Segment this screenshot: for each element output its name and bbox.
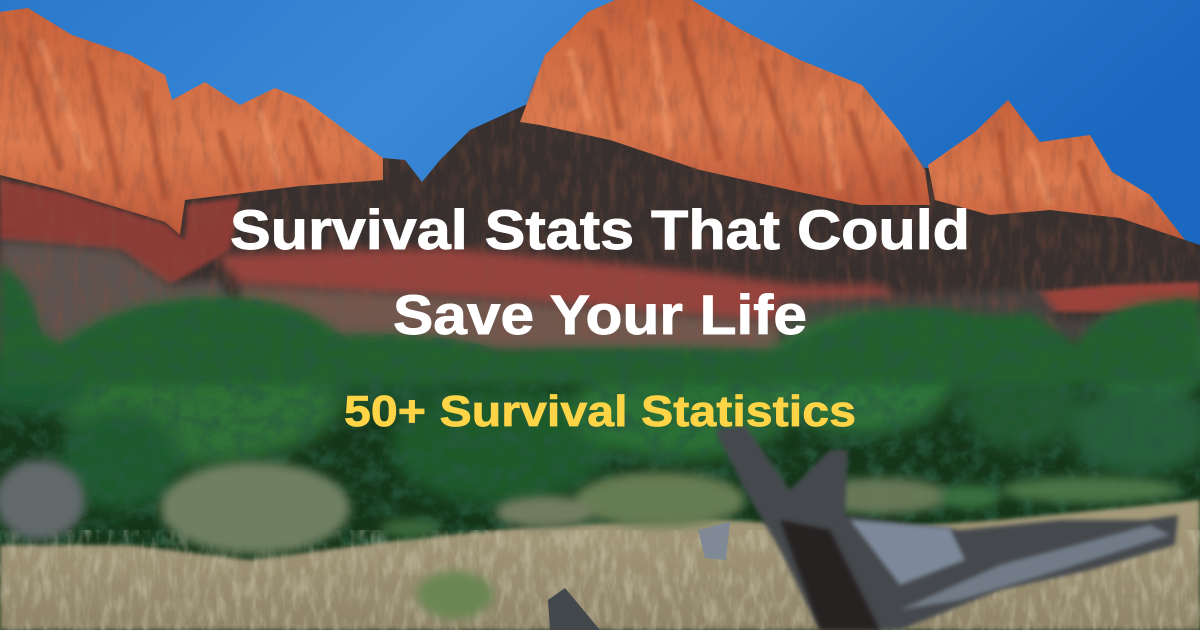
grey scree left: [0, 240, 240, 360]
canopy middle: [390, 385, 610, 505]
scree lower centre: [240, 285, 780, 362]
canopy left: [50, 305, 350, 465]
red cliff band right: [1035, 282, 1200, 312]
rock texture: [0, 0, 1200, 360]
canopy right: [765, 315, 955, 435]
grass: [0, 500, 1200, 630]
title: Survival Stats That Could: [230, 198, 970, 261]
scree right: [780, 290, 1200, 345]
foliage texture: [0, 265, 1200, 545]
shadowed lower slope: [0, 100, 1200, 360]
shrubs: [0, 460, 1180, 619]
red cliff band left: [0, 180, 240, 285]
grass texture: [0, 530, 1200, 630]
trees: [0, 265, 1200, 545]
right peak: [928, 100, 1185, 240]
rock streak highlights: [20, 20, 1100, 215]
ground base: [0, 360, 1200, 630]
sky: [0, 0, 1200, 260]
title: [230, 198, 970, 346]
treetops: [0, 265, 1200, 385]
title: Save Your Life: [393, 283, 807, 346]
subtitle: 50+ Survival Statistics: [344, 387, 856, 436]
red cliff band centre: [215, 248, 900, 322]
central peak: [520, 0, 930, 205]
left massif: [0, 8, 383, 235]
fallen tree trunk: [548, 425, 1178, 630]
mountains: [0, 0, 1200, 362]
